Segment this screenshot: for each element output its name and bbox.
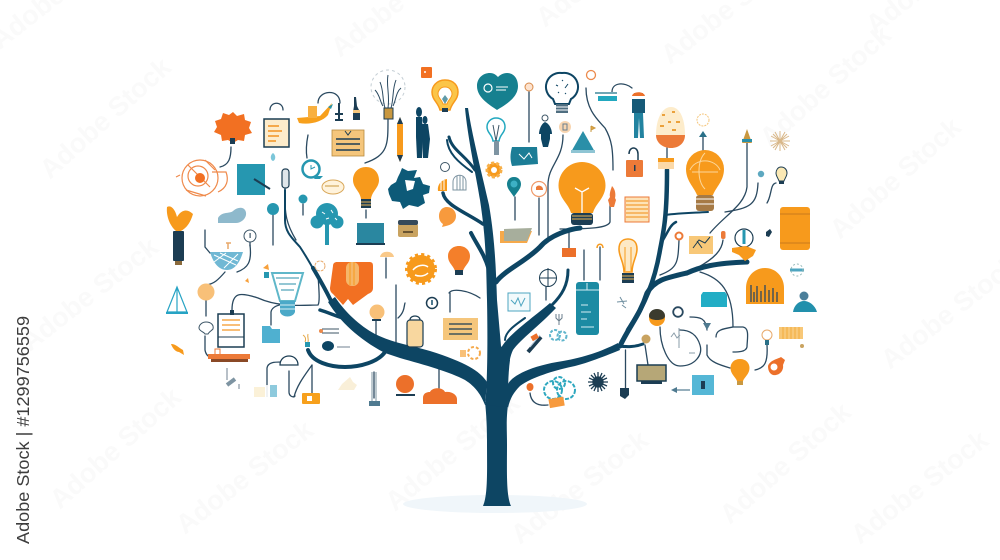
infographic canvas: Adobe Stock: [505, 424, 655, 550]
icon: orange robot: [732, 229, 756, 261]
right stub twig: [663, 222, 676, 240]
icon: orange ring: [586, 70, 596, 80]
icon: blue mesh funnel: [210, 252, 243, 270]
lower left branch: [308, 350, 385, 367]
right main branch: [508, 343, 620, 408]
icon: down arrow tip: [703, 323, 711, 330]
icon: cyan card: [701, 292, 727, 307]
icon: small teal ball: [758, 171, 764, 177]
icon: sketch gear outline: [176, 160, 227, 196]
icon: red cloud: [423, 388, 457, 404]
icon: sunburst: [770, 131, 790, 151]
thin connecting cables: [205, 84, 776, 405]
icon: cyan folder left: [262, 326, 280, 343]
infographic canvas: Adobe Stock: [170, 414, 320, 540]
icon: teal person: [793, 292, 817, 312]
icon: little flames: [303, 334, 310, 347]
icon: tool pens: [528, 333, 541, 352]
icon: teal balloon pin: [507, 177, 521, 197]
icon: orange circle ring: [532, 182, 546, 196]
icon: orange padlock: [626, 148, 643, 177]
icon: orange balloon: [439, 207, 456, 227]
left stub twig: [320, 310, 350, 320]
icon: orange capsule pin: [721, 231, 726, 239]
icon: cyan sphere network: [544, 377, 575, 399]
icon: navy leaf blob: [388, 168, 430, 209]
icon: teal clock: [302, 160, 323, 179]
icon: red orb: [396, 375, 415, 396]
infographic canvas: Adobe Stock: [34, 51, 177, 184]
icon: teal tall device: [576, 282, 599, 335]
infographic canvas: Adobe Stock: [15, 231, 165, 357]
icon: teal square with pen: [237, 164, 270, 195]
icon: outlined dome: [280, 356, 298, 365]
icon: small gray clock: [440, 162, 450, 172]
icon: tan burst lamp: [370, 304, 384, 321]
icon: arrow stripes: [319, 329, 339, 333]
icon: filament bulb: [371, 70, 405, 119]
low right twig: [618, 344, 643, 347]
icon: map: [689, 236, 713, 254]
icon: sketch chart: [508, 293, 530, 311]
icon: orange rectangle: [780, 207, 810, 250]
icon: small pin bulb: [525, 83, 533, 91]
ground shadow: [403, 495, 587, 513]
icon: orange label: [302, 393, 320, 404]
icon: left arrow: [671, 387, 690, 393]
icon: navy bottle: [353, 97, 360, 120]
icon: right orange bulb: [686, 150, 724, 211]
icon: tower: [369, 372, 380, 406]
mid right branch: [496, 228, 580, 282]
icon: cyan folder: [692, 375, 714, 395]
icon: big orange bulb: [558, 162, 606, 225]
icon: tan ball top: [642, 334, 650, 344]
icon: teal chat box: [510, 147, 538, 166]
icon: mushroom lamp: [380, 252, 394, 257]
icon: orange small bulb: [730, 359, 750, 385]
icon: pale tan burst: [198, 284, 214, 300]
icon: small stripe gauge: [438, 179, 447, 191]
icon: brown ball: [649, 309, 665, 326]
icon: worker figure: [632, 92, 645, 138]
icon: info ring: [244, 230, 256, 242]
icon: pink sketch ring: [315, 261, 325, 271]
icon: small bead: [800, 344, 804, 348]
icon: outline ring lamp: [199, 322, 213, 334]
infographic canvas: Adobe Stock: [824, 111, 967, 244]
icon: navy badge circle: [426, 298, 438, 308]
icon: orange dome chart: [746, 268, 784, 304]
icon: small fork: [556, 314, 562, 325]
icon: tan cone: [742, 129, 752, 143]
icon: orange base: [208, 349, 250, 362]
icon: tan box: [398, 220, 418, 237]
icon: small yellow bulb: [776, 167, 787, 184]
icon: tan note small: [548, 397, 565, 408]
icon: small cyan stick: [264, 272, 269, 278]
right side twig: [665, 212, 708, 215]
icon: orange ring pin: [676, 232, 682, 240]
icon: orange tree blob: [214, 112, 252, 144]
icon: orange gear small: [487, 163, 501, 177]
icon: small navy ring: [673, 307, 683, 317]
icon: striped note: [625, 197, 649, 222]
icon: device card: [218, 310, 244, 347]
icon: phone capsule: [282, 169, 289, 188]
icon: tan stripe bar: [779, 327, 803, 339]
upper left outer branch: [285, 190, 332, 303]
left branch taper: [313, 268, 332, 303]
icon: little flag: [591, 126, 595, 132]
icon: pale pillars: [254, 385, 277, 397]
icon: orange sun gear: [407, 255, 435, 283]
icon: orange stripe pencil: [397, 117, 403, 162]
left twig: [471, 233, 489, 270]
icon: teal triangle: [571, 131, 595, 153]
icon: navy blob: [322, 341, 350, 351]
icon: tan folder: [500, 228, 532, 243]
icon: target with arrow: [697, 114, 709, 137]
inner left small twig: [447, 140, 472, 172]
icon: teal heart: [477, 73, 518, 110]
icon: cyan tiny drop: [271, 153, 275, 161]
second right branch tip: [552, 270, 568, 305]
icon: orange ring tag: [768, 357, 785, 375]
icon: teal tree: [310, 203, 344, 245]
icon: small navy bit: [766, 229, 772, 237]
infographic canvas: Adobe Stock: [44, 381, 187, 514]
icon: small cyan glyph: [790, 264, 804, 276]
icon: small orange mark: [226, 243, 231, 249]
left main branch: [328, 297, 487, 405]
icon: small teal pin ball: [298, 194, 308, 204]
icon: tan circle: [559, 121, 571, 133]
icon: cyan network: [550, 330, 566, 340]
icon: crosshair: [539, 268, 557, 287]
icons: [166, 67, 817, 408]
icon: yellow hand flame with cylinder: [167, 206, 193, 265]
icon: tan monitor: [637, 365, 666, 384]
icon: squiggle chart: [671, 328, 695, 353]
icon: teal pin ball: [267, 203, 279, 215]
icon: red rectangle: [562, 248, 576, 257]
icon: mid orange bulb: [353, 167, 379, 208]
icon: golden ring bulb: [432, 80, 458, 112]
icon: red pin: [526, 383, 534, 391]
icon: dotted bowl bulb: [656, 107, 685, 148]
icon: orange outline bulb: [619, 239, 637, 283]
infographic canvas: Adobe Stock: [714, 396, 857, 529]
icon: flame: [608, 186, 616, 207]
right lower curve twig: [505, 318, 525, 340]
tree trunk: [483, 402, 511, 506]
icon: blue cloud: [218, 208, 246, 223]
icon: tan sketch disc: [322, 180, 344, 194]
icon: orange bulb on stem: [448, 246, 470, 275]
icon: birdcage: [453, 175, 466, 190]
icon: small orange hook: [597, 244, 603, 248]
tree: [285, 108, 747, 506]
icon: cyan funnel bulb: [272, 273, 303, 316]
icon: navy burst: [588, 372, 608, 392]
icon: small navy figure: [539, 115, 552, 147]
icon: cream house: [338, 377, 357, 390]
infographic canvas: Adobe Stock: [845, 424, 995, 550]
upper right branch: [620, 262, 747, 346]
icon: document square: [264, 119, 289, 147]
icon: tan padlock: [407, 316, 423, 347]
icon: two people: [416, 107, 430, 158]
icon: tan note card: [658, 158, 674, 169]
icon: orange fish: [171, 344, 184, 355]
icon: orange boat bird: [297, 103, 333, 124]
icon: small sketch tool: [617, 297, 627, 308]
upper right vertical limb: [628, 170, 667, 330]
icon: tan note: [443, 318, 478, 340]
icon: cyan outline bulb: [487, 118, 505, 155]
infographic canvas: Adobe Stock: [754, 19, 897, 152]
icon: orange small marks: [245, 264, 269, 283]
icon: navy round bulb: [546, 73, 578, 113]
icon: red note square: [421, 67, 432, 78]
icon: tan scribble: [460, 347, 480, 359]
icon: envelope note: [332, 130, 364, 156]
central stem: [465, 108, 510, 407]
icon: red orange badge: [330, 262, 373, 305]
upper left twig: [443, 193, 483, 224]
top left twig: [449, 137, 475, 170]
icon: small pin bulb right: [762, 330, 772, 345]
icon: cyan bar: [595, 92, 617, 101]
second right branch: [501, 303, 556, 372]
icon: teal box: [356, 223, 385, 245]
icon: gray tool: [227, 368, 239, 389]
icon: hanging navy cup: [620, 388, 629, 399]
icon: pin: [335, 103, 343, 120]
infographic canvas: Adobe Stock: [380, 387, 526, 517]
icon: cyan triangle tent: [166, 287, 188, 313]
stock id vertical caption: Adobe Stock | #1299756559: [13, 316, 33, 544]
